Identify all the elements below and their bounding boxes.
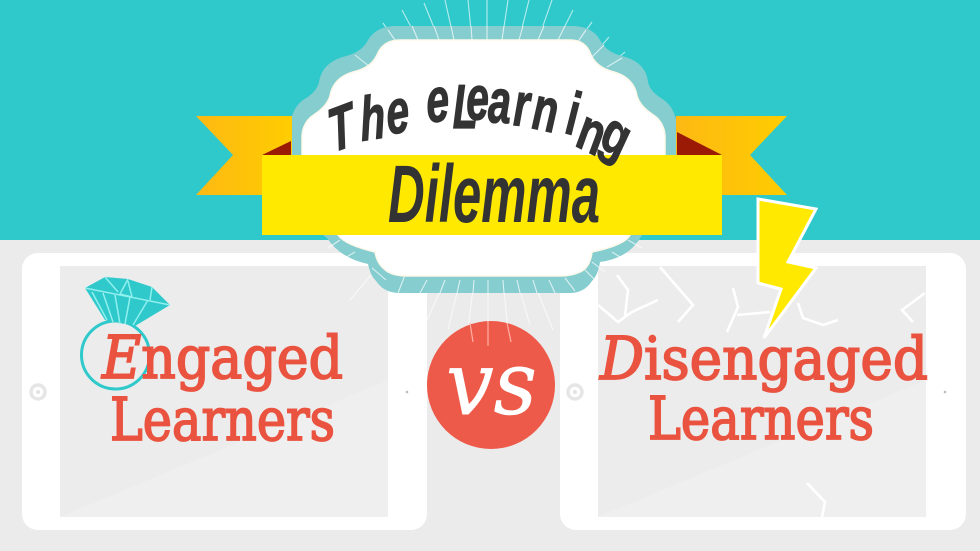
text: Disengaged Learners: Learners xyxy=(648,384,874,453)
text: Disengaged Learners xyxy=(599,324,928,453)
title badge xyxy=(290,26,677,293)
sun rays xyxy=(350,0,625,330)
left ribbon tail xyxy=(196,116,292,195)
vs circle: vs xyxy=(446,332,537,435)
right ribbon tail xyxy=(676,116,787,195)
vs circle xyxy=(427,321,555,449)
yellow banner xyxy=(262,155,722,235)
icon: diamond ring xyxy=(82,277,170,389)
icon: lightning bolt xyxy=(758,199,816,338)
panel: left tablet xyxy=(22,253,427,530)
text: Engaged Learners: Engaged xyxy=(101,323,343,392)
text: Engaged Learners: Learners xyxy=(110,385,335,454)
text: Disengaged Learners: Disengaged xyxy=(599,324,928,393)
title text: The eLearning: The eLearning xyxy=(323,63,637,174)
text: Engaged Learners xyxy=(101,323,343,454)
panel: right tablet xyxy=(560,253,966,530)
title text: Dilemma: Dilemma xyxy=(388,149,600,240)
